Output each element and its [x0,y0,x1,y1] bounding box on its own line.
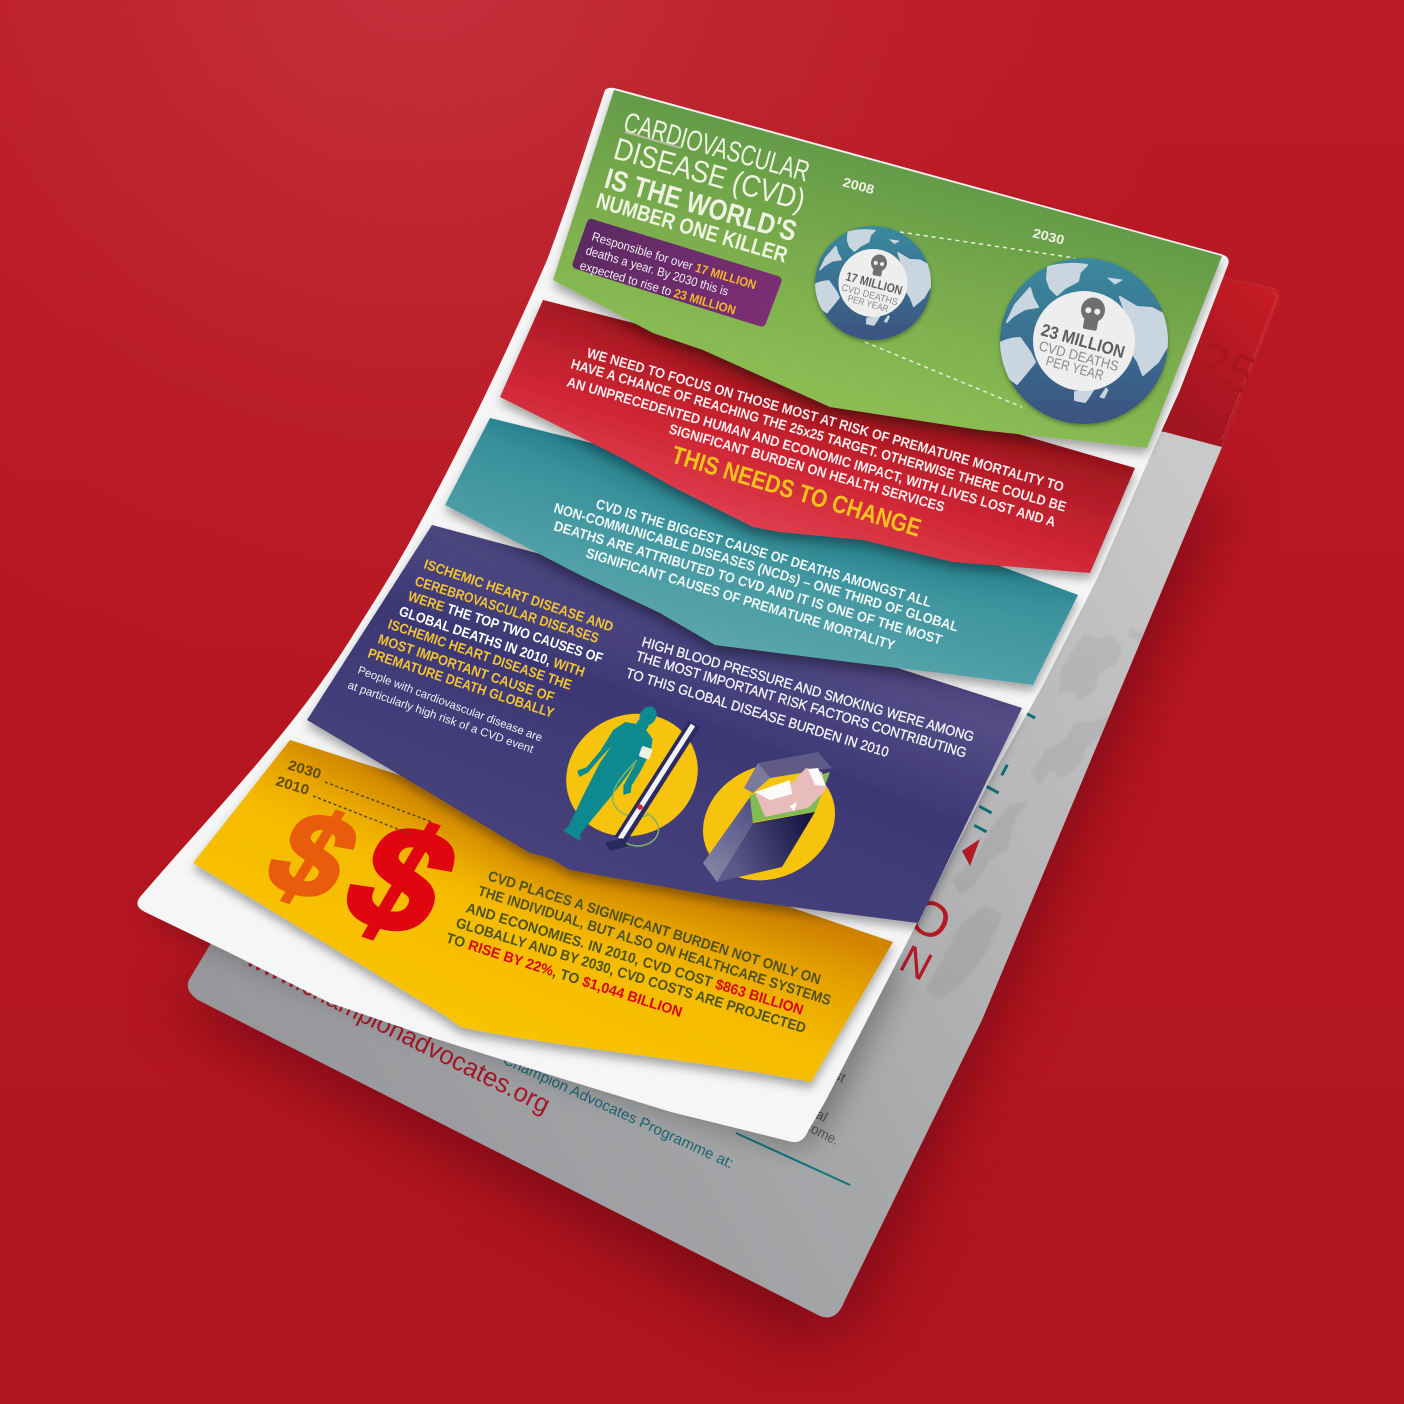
cost text [444,869,833,1037]
callout: purple statistic box: Responsible for over 17 MILLION [590,229,758,292]
front sheet shadow [150,700,900,1148]
panel: back sheet: ial [811,1104,830,1125]
label: 2010: 2010 [274,773,312,798]
panel: teal NCD band [445,400,1090,685]
right text block: HIGH BLOOD PRESSURE AND SMOKING WERE AMONG [640,634,976,745]
chart: small globe 2008 [815,226,931,340]
icon: orange dollar 2010: $ [244,785,382,927]
callout: purple statistic box: expected to rise to 23 MILLION [578,258,738,318]
left text block: GLOBAL DEATHS IN 2010, WITH [397,603,587,680]
chart: small globe 2008: PER YEAR [846,293,890,315]
back sheet fragments: come. [803,1117,842,1148]
chart: large globe 2030 [1000,258,1168,424]
icon: skull [869,253,888,277]
back sheet red header: O [900,885,960,953]
chart: small globe 2008: 17 MILLION [844,269,904,298]
back sheet red header: N [893,937,939,990]
cost text: CVD PLACES A SIGNIFICANT BURDEN NOT ONLY ON [486,869,823,988]
title: CARDIOVASCULAR [620,107,813,188]
icon: mercury gauge [620,724,694,840]
panel: back sheet: st [832,1066,849,1086]
chart: small globe 2008: CVD DEATHS [840,282,899,308]
cost text: GLOBALLY AND BY 2030, CVD COSTS ARE PROJECTED [454,916,808,1037]
teal text: CVD IS THE BIGGEST CAUSE OF DEATHS AMONGST ALL [594,496,934,610]
panel: front sheet paper [137,88,1229,1142]
panel: green headline band [553,90,1222,448]
back sheet programme text: Champion Advocates Programme at: [500,1051,736,1172]
teal text: SIGNIFICANT CAUSES OF PREMATURE MORTALITY [584,545,898,653]
left text block [366,556,616,721]
red text: AN UNPRECEDENTED HUMAN AND ECONOMIC IMPACT, WITH LIVES LOST AND A [565,374,1058,530]
title [594,107,813,268]
panel: back sheet [188,230,1282,1317]
title: IS THE WORLD'S [601,163,800,248]
icon: cigarette packet [684,743,854,901]
left text block: ISCHEMIC HEART DISEASE AND [422,556,616,635]
chart: large globe 2030: CVD DEATHS [1037,337,1121,374]
icon: red dollar 2030: $ [317,790,486,969]
title: DISEASE (CVD) [610,131,809,218]
panel: navy risk factors band [307,500,1040,923]
back sheet world map [925,628,1146,1000]
year label 2008: 2008 [841,174,876,197]
left text block: MOST IMPORTANT CAUSE OF [376,631,557,705]
back sheet heading fragments [974,712,1036,833]
icon: blood pressure [546,691,718,858]
panel: yellow cost band [193,715,920,1082]
chart: large globe 2030: PER YEAR [1044,352,1105,383]
right text block: TO THIS GLOBAL DISEASE BURDEN IN 2010 [624,665,891,760]
red text: WE NEED TO FOCUS ON THOSE MOST AT RISK OF PREMATURE MORTALITY TO [585,344,1066,495]
left text block: WERE THE TOP TWO CAUSES OF [406,588,605,666]
title: NUMBER ONE KILLER [594,188,791,268]
back sheet shadow [175,480,1230,1340]
red text: HAVE A CHANCE OF REACHING THE 25x25 TARGET. OTHERWISE THERE COULD BE [569,356,1068,515]
cost text: TO RISE BY 22%, TO $1,044 BILLION [444,931,684,1021]
panel: red premature mortality band [500,270,1148,573]
left text block: CEREBROVASCULAR DISEASES [413,573,601,646]
cost text: AND ECONOMIES. IN 2010, CVD COST $863 BILLION [464,901,805,1019]
right text block: THE MOST IMPORTANT RISK FACTORS CONTRIBUTING [634,648,969,761]
teal text: DEATHS ARE ATTRIBUTED TO CVD AND IT IS ONE OF THE MOST [552,518,944,648]
icon: person silhouette [546,691,675,850]
label: 2030: 2030 [286,757,324,782]
small note: at particularly high risk of a CVD event [346,680,536,756]
back sheet website: www.championadvocates.org [241,942,555,1119]
callout: this needs to change: THIS NEEDS TO CHANGE [668,441,924,543]
small note: People with cardiovascular disease are [356,665,544,744]
teal text: NON-COMMUNICABLE DISEASES (NCDs) – ONE THIRD OF GLOBAL [552,500,961,635]
back sheet red header [893,250,1282,1000]
callout: purple statistic box [572,219,782,327]
icon: skull [1078,296,1107,332]
callout: purple statistic box: deaths a year. By 2030 this is [584,243,730,299]
year label 2030: 2030 [1031,225,1066,248]
back sheet red header: 25 [1188,329,1266,408]
red text: SIGNIFICANT BURDEN ON HEALTH SERVICES [667,421,947,515]
left text block: ISCHEMIC HEART DISEASE THE [386,616,574,693]
left text block: PREMATURE DEATH GLOBALLY [366,645,557,721]
cost text: THE INDIVIDUAL, BUT ALSO ON HEALTHCARE SYSTEMS [476,884,833,1009]
chart: large globe 2030: 23 MILLION [1039,320,1127,362]
